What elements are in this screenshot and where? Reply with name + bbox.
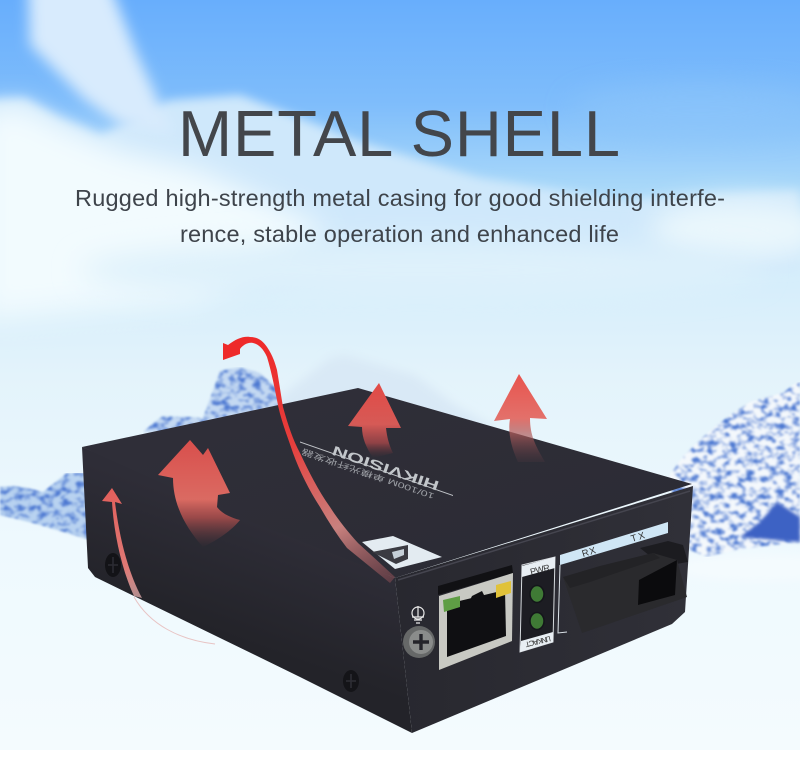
fiber port label strip: RX bbox=[581, 545, 598, 560]
warning label on top bbox=[362, 536, 442, 569]
RJ45 amber LED bbox=[496, 581, 511, 598]
device top face bbox=[82, 388, 692, 578]
arrow: large curved red arrow bbox=[223, 337, 395, 583]
fiber port label strip: TX bbox=[630, 530, 647, 545]
top edge highlight bbox=[398, 491, 690, 580]
device left face bbox=[82, 447, 412, 733]
RJ45 port bbox=[438, 565, 513, 670]
device front face bbox=[395, 486, 693, 733]
status LED panel bbox=[520, 557, 555, 652]
arrow: middle heat arrow bbox=[348, 383, 401, 458]
brand print on top: HIKVISION bbox=[330, 443, 441, 493]
link LED bbox=[530, 612, 544, 630]
arrow: large left heat arrow bbox=[158, 440, 240, 547]
title: METAL SHELL bbox=[178, 97, 620, 170]
clouds bbox=[0, 0, 800, 320]
left face screw bbox=[105, 553, 121, 577]
RJ45 green LED bbox=[443, 596, 460, 612]
description text: rence, stable operation and enhanced life bbox=[180, 221, 619, 247]
snowy mountain, right bbox=[668, 382, 800, 582]
front bottom screw bbox=[343, 670, 359, 692]
description text bbox=[75, 185, 725, 247]
status LED panel: LINK/ACT bbox=[524, 634, 552, 649]
fiber port label strip bbox=[558, 522, 668, 633]
snowy mountains, back bbox=[143, 355, 500, 440]
status LED panel: PWR bbox=[529, 562, 551, 577]
connector opening bbox=[638, 560, 677, 605]
ground symbol bbox=[412, 606, 424, 623]
bottom white strip bbox=[0, 750, 800, 764]
media converter device bbox=[82, 388, 693, 733]
brand print on top bbox=[300, 442, 453, 502]
description text: Rugged high-strength metal casing for good shielding interfe- bbox=[75, 185, 725, 211]
arrow: small thin arrow on the left bbox=[102, 488, 215, 644]
PWR LED bbox=[530, 586, 544, 602]
arrow: right heat arrow bbox=[494, 374, 547, 462]
ground screw bbox=[403, 626, 435, 658]
snowy mountain, left bbox=[0, 473, 90, 540]
SC fiber connector bbox=[563, 541, 688, 633]
brand print on top: 10/100M 单模光纤收发器 bbox=[300, 447, 436, 502]
